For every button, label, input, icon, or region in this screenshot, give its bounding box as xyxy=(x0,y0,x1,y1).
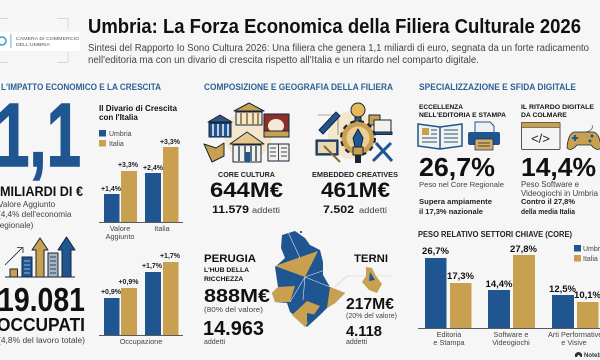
logo: Camera di Commercio: DELL'UMBRIA xyxy=(16,42,51,48)
heading: composizione: COMPOSIZIONE E GEOGRAFIA DELLA FILIERA xyxy=(204,82,393,92)
valore aggiunto text xyxy=(0,200,72,230)
stat: core cultura xyxy=(210,170,283,216)
stat: Perugia: addetti xyxy=(204,339,225,346)
panel: composizione e geografia xyxy=(203,82,398,346)
heading: ritardo digitale: IL RITARDO DIGITALE xyxy=(521,104,594,111)
stat: 14,4%: 14,4% xyxy=(521,154,596,182)
stat: lavoro totale: (4,8% del lavoro totale) xyxy=(0,336,85,345)
icon: embedded creatives xyxy=(316,103,392,163)
bar chart: settori chiave: 14,4% xyxy=(486,279,513,290)
legend: divario: Italia xyxy=(109,141,124,148)
bar chart: valore aggiunto e Italia: +2,4% xyxy=(143,165,164,172)
bar chart: occupazione: +1,7% xyxy=(142,263,163,270)
icon: core cultura xyxy=(204,103,289,162)
stat: embedded creatives: 461M€ xyxy=(321,179,390,202)
heading: impatto: L'IMPATTO ECONOMICO E LA CRESCITA xyxy=(1,82,161,92)
text: peso software: Videogiochi in Umbria xyxy=(521,189,599,198)
stat: Perugia: PERUGIA xyxy=(204,253,256,265)
heading: ritardo digitale: DA COLMARE xyxy=(521,112,567,119)
bar chart: valore aggiunto e Italia: Italia xyxy=(154,224,171,233)
stat: 26,7%: 26,7% xyxy=(419,154,495,182)
bar chart: settori chiave: 26,7% xyxy=(422,246,450,257)
bar chart: valore aggiunto e Italia: +1,4% xyxy=(101,186,122,193)
legend: divario: Umbria xyxy=(109,131,132,138)
stat: embedded creatives: addetti xyxy=(359,206,387,215)
stat: Terni: (20% del valore) xyxy=(346,313,397,320)
stat: core cultura: CORE CULTURA xyxy=(218,170,276,179)
icon: printer xyxy=(468,122,500,150)
bar chart: settori chiave: e Stampa xyxy=(433,338,466,347)
stat: occupati number: 19.081 xyxy=(0,281,85,318)
bar chart: valore aggiunto e Italia xyxy=(99,139,183,241)
heading: eccellenza xyxy=(419,104,506,119)
stat: Perugia: RICCHEZZA xyxy=(204,276,243,283)
heading: divario xyxy=(99,104,178,122)
stat: Terni xyxy=(335,253,397,346)
text: peso software: Peso Software e xyxy=(521,180,579,189)
bar chart: settori chiave: 17,3% xyxy=(447,271,475,282)
logo: Camera di Commercio: CAMERA DI COMMERCIO xyxy=(16,36,79,42)
bar chart: settori chiave: Editoria xyxy=(437,330,462,339)
bar chart: settori chiave: 27,8% xyxy=(510,244,538,255)
stat: core cultura: addetti xyxy=(252,206,280,215)
icon: code window xyxy=(522,122,560,150)
stat: Terni: 4.118 xyxy=(346,324,382,340)
text: contro: della media Italia xyxy=(521,207,576,216)
subtitle: nell'editoria ma con un divario di crescita rispetto all'Italia e un ritardo nel comparto digitale. xyxy=(88,55,479,66)
bar chart: settori chiave: 12,5% xyxy=(549,284,577,295)
stat: embedded creatives: 7.502 xyxy=(323,204,354,216)
stat: Perugia: 14.963 xyxy=(203,318,264,340)
icon: gamepad xyxy=(567,125,600,149)
logo: Camera di Commercio xyxy=(0,18,80,62)
icon: growth arrows xyxy=(5,237,75,278)
stat: embedded creatives: EMBEDDED CREATIVES xyxy=(312,170,398,179)
heading: divario: con l'Italia xyxy=(99,113,138,122)
bar chart: occupazione: +1,7% xyxy=(160,253,181,260)
bar chart: settori chiave xyxy=(418,244,600,347)
heading: eccellenza: ECCELLENZA xyxy=(419,104,463,111)
map: Umbria xyxy=(272,231,345,327)
stat: core cultura: 11.579 xyxy=(212,204,249,216)
bar chart: settori chiave: Videogiochi xyxy=(492,338,530,347)
subtitle: Sintesi del Rapporto Io Sono Cultura 2026: Una filiera che genera 1,1 miliardi di euro, segnata da un forte radicamento xyxy=(88,43,590,54)
watermark: NotebookLM xyxy=(575,352,600,359)
stat: Perugia: (80% del valore) xyxy=(204,305,264,314)
heading: divario: Il Divario di Crescita xyxy=(99,104,178,113)
bar chart: settori chiave: Software e xyxy=(494,330,528,339)
heading: specializzazione: SPECIALIZZAZIONE E SFIDA DIGITALE xyxy=(419,82,576,92)
stat: Terni: addetti xyxy=(346,339,367,346)
legend: divario xyxy=(99,130,132,148)
bar chart: occupazione xyxy=(99,253,183,346)
stat: Perugia: L'HUB DELLA xyxy=(204,267,249,274)
bar chart: valore aggiunto e Italia: +3,3% xyxy=(118,162,139,169)
stat: Terni: TERNI xyxy=(354,253,388,265)
valore aggiunto text: (4,4% dell'economia xyxy=(0,210,72,219)
text: peso software xyxy=(521,180,599,198)
stat: Terni: 217M€ xyxy=(346,296,394,313)
text: supera: il 17,3% nazionale xyxy=(419,207,483,216)
panel: specializzazione e sfida digitale xyxy=(418,82,600,359)
text: supera xyxy=(419,197,492,216)
subtitle xyxy=(88,43,590,66)
label miliardi: MILIARDI DI € xyxy=(0,183,83,199)
bar chart: occupazione: +0,9% xyxy=(118,279,139,286)
heading: peso relativo: PESO RELATIVO SETTORI CHIAVE (CORE) xyxy=(418,230,572,239)
bar chart: valore aggiunto e Italia: Aggiunto xyxy=(106,232,134,241)
text: peso core: Peso nel Core Regionale xyxy=(419,180,504,189)
icon: open book xyxy=(418,124,462,149)
stat: core cultura: 644M€ xyxy=(210,179,283,202)
heading: eccellenza: NELL'EDITORIA E STAMPA xyxy=(419,112,506,119)
mini map: Terni xyxy=(362,267,382,293)
bar chart: occupazione: Occupazione xyxy=(120,337,162,346)
stat: Perugia xyxy=(203,253,270,346)
bar chart: valore aggiunto e Italia: +3,3% xyxy=(160,139,181,146)
text: contro: Contro il 27,8% xyxy=(521,197,575,206)
text: supera: Supera ampiamente xyxy=(419,197,492,206)
legend: settori: Italia xyxy=(583,256,598,263)
bar chart: occupazione: +0,9% xyxy=(101,289,122,296)
bar chart: settori chiave: e Visive xyxy=(561,338,587,347)
stat: embedded creatives xyxy=(312,170,398,216)
icon: code window: </> xyxy=(531,131,550,146)
bar chart: valore aggiunto e Italia: Valore xyxy=(110,224,130,233)
text: contro xyxy=(521,197,576,216)
stat: Perugia: 888M€ xyxy=(204,285,270,306)
heading: ritardo digitale xyxy=(521,104,594,119)
panel: impatto economico e crescita xyxy=(0,82,183,346)
legend: settori xyxy=(574,245,600,263)
